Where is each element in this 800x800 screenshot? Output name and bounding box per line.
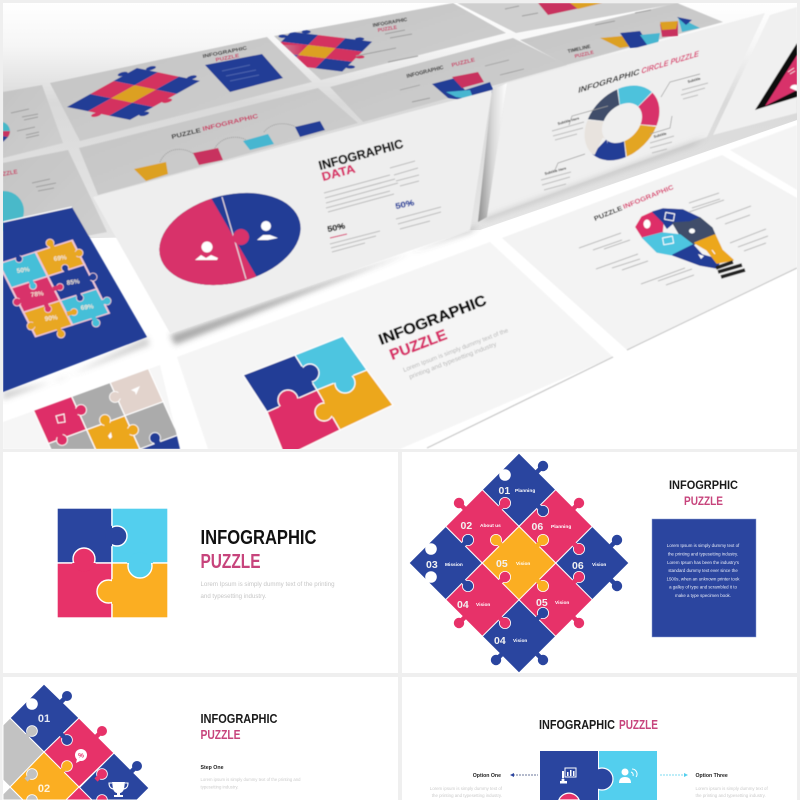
piece labels: Vision (592, 562, 606, 568)
callout lines (555, 74, 700, 170)
icon: clipboard (56, 414, 65, 423)
slide: diamond puzzle upper: PUZZLE (377, 25, 398, 34)
option three: the printing and typesetting industry. (696, 793, 766, 798)
timeline puzzle pieces (134, 162, 168, 181)
piece labels: 05 (536, 597, 548, 609)
bulb base (716, 262, 745, 277)
option three (696, 773, 769, 798)
percent labels: 69% (53, 254, 67, 263)
blue text box (652, 519, 756, 637)
blue text box: a galley of type and scrambled it to (669, 584, 737, 590)
piece labels: Mission (445, 562, 463, 568)
slide title (578, 49, 700, 95)
panel: step puzzle: Lorem ipsum is simply dummy text of the printing and (200, 777, 301, 782)
percent labels: 90% (44, 314, 58, 323)
slide: diamond puzzle upper: INFOGRAPHIC (372, 17, 408, 29)
icon: person pink (195, 242, 218, 260)
donut chart (584, 85, 660, 162)
icons (644, 212, 715, 259)
two piece puzzle (540, 751, 657, 800)
slide title: INFOGRAPHIC (202, 45, 248, 60)
four piece puzzle square (57, 508, 168, 618)
piece labels: 03 (426, 559, 438, 571)
slide: bottom left icon puzzle (4, 366, 181, 449)
piece labels: Vision (555, 600, 569, 606)
icon: percent bubble (75, 749, 87, 763)
bulb blue lower piece (673, 245, 720, 268)
slide heading: INFOGRAPHIC (317, 137, 405, 173)
four piece puzzle (243, 336, 393, 452)
slide: circle puzzle: Subtitle Here (544, 166, 567, 176)
slide title: PUZZLE (215, 53, 241, 64)
slide: circle puzzle: Subtitle (653, 132, 667, 139)
arrow: left (510, 773, 538, 777)
rotated puzzle (3, 684, 149, 800)
percent labels: 78% (30, 290, 44, 299)
white notches (425, 469, 511, 583)
panel: step puzzle: typesetting industry. (200, 784, 238, 790)
heading: INFOGRPHIC (669, 478, 738, 492)
bulb pink piece (636, 212, 663, 238)
callout text lines (541, 83, 708, 190)
arrow: right (660, 773, 688, 777)
percent labels: 50% (16, 266, 30, 275)
number labels: 01 (38, 713, 50, 725)
panel: step puzzle (3, 677, 398, 800)
panel: step puzzle: PUZZLE (200, 728, 240, 742)
option one (430, 773, 503, 798)
pink tabs (453, 497, 585, 629)
slide: puzzle infographic title: PUZZLE (387, 326, 449, 364)
callout labels: Subtitle Here (557, 116, 580, 126)
panel: title slide with four piece puzzle: and typesetting industry. (200, 593, 267, 600)
piece labels: 06 (532, 521, 543, 533)
subtitle: Lorem Ipsum is simply dummy text of the printing (200, 581, 335, 588)
piece labels: Vision (476, 602, 490, 608)
blue text box: 1500s, when an unknown printer took (667, 576, 740, 582)
piece labels: 06 (572, 560, 584, 572)
slide: puzzle light bulb (502, 155, 797, 350)
diamond puzzle (409, 453, 629, 673)
slide: circle puzzle (480, 13, 765, 222)
shadow under blue slide (3, 337, 150, 400)
piece labels: About us (480, 523, 501, 529)
panel: option puzzle: PUZZLE (619, 718, 658, 732)
icon: person blue (257, 221, 278, 240)
slide: puzzle infographic timeline: PUZZLE (171, 127, 202, 141)
option one: Lorem ipsum is simply dummy text of (430, 786, 503, 791)
bulb blue top piece (653, 209, 700, 228)
heading: INFOGRAPHIC (539, 718, 615, 732)
slide title (202, 46, 248, 62)
slide: middle infographic puzzle: INFOGRAPHIC (406, 65, 444, 80)
slide: timeline puzzle (520, 3, 723, 65)
diamond puzzle (67, 66, 200, 120)
slide: left edge puzzle circle: ZZLE (2, 169, 18, 178)
mockup: perspective slide showcase (3, 3, 797, 449)
option three: Lorem ipsum is simply dummy text of (696, 786, 769, 791)
connectors (160, 124, 296, 162)
slide: puzzle infographic timeline: INFOGRAPHIC (202, 113, 260, 133)
yellow tabs (490, 534, 549, 592)
slide: blue percent puzzle (0, 207, 147, 392)
panel: step puzzle: 02 (38, 783, 50, 795)
slide: timeline puzzle: TIMELINE (567, 44, 592, 55)
icon: trophy (109, 782, 128, 797)
blue tabs (462, 460, 623, 666)
piece labels: 05 (496, 558, 508, 570)
tab necks (16, 243, 107, 334)
slide: infographic data: DATA (320, 161, 357, 184)
icon: rocket (108, 432, 112, 439)
slide: middle infographic puzzle (330, 38, 567, 122)
stat 50 percent black: 50% (327, 221, 346, 234)
body text (324, 161, 419, 212)
stat 50 percent blue: 50% (395, 198, 415, 211)
slide: puzzle infographic title: printing and typesetting industry (408, 341, 498, 381)
panel: option puzzle (402, 677, 797, 800)
slide: puzzle infographic timeline (79, 88, 358, 195)
puzzle tabs (13, 239, 111, 338)
slide title: CIRCLE PUZZLE (641, 49, 700, 76)
bulb (636, 209, 745, 277)
piece labels: 04 (494, 635, 506, 647)
slide: left edge circle (3, 85, 63, 158)
subtitle: Lorem Ipsum is simply dummy text of the (402, 327, 510, 374)
slide: puzzle light bulb: INFOGRAPHIC (622, 184, 675, 211)
shadow under data slide (170, 225, 480, 345)
slide: far right blank (730, 125, 797, 190)
slide: phone (713, 7, 797, 135)
icon: percent bubble: % (78, 752, 84, 760)
slide: top strip (457, 3, 680, 33)
panel: title slide with four piece puzzle (3, 452, 398, 673)
panel: diamond puzzle (402, 452, 797, 673)
piece labels: 02 (460, 520, 472, 532)
split circle chart (158, 192, 302, 286)
heading: INFOGRAPHIC (200, 527, 316, 549)
piece labels: Planning (551, 524, 571, 530)
panel: diamond puzzle: PUZZLE (684, 494, 723, 508)
slide: left edge puzzle circle (3, 150, 107, 236)
percent labels: 69% (80, 303, 94, 312)
icon: paper plane (131, 386, 140, 395)
heading: INFOGRAPHIC (376, 292, 489, 349)
slide: middle infographic puzzle: PUZZLE (451, 57, 476, 69)
blue text box: the printing and typesetting industry. (668, 552, 738, 556)
percent labels (16, 254, 94, 323)
slide: diamond puzzle back row (50, 37, 312, 141)
piece labels: 04 (457, 599, 469, 611)
icon: person with target (619, 768, 637, 783)
heading: INFOGRAPHIC (200, 712, 278, 726)
option one: Option One (473, 773, 501, 779)
blue text box: make a type specimen book. (675, 593, 731, 598)
slide: infographic data (93, 90, 492, 333)
piece labels: Planning (515, 488, 535, 494)
slide: diamond puzzle upper (251, 3, 506, 80)
blue text box: Lorem Ipsum has been the industry's (667, 560, 740, 565)
icon: presenter chart (560, 768, 576, 784)
blue text box: standard dummy text ever since the (668, 568, 738, 573)
slide title: INFOGRAPHIC (578, 67, 641, 95)
table gradient behind slides (3, 42, 797, 238)
piece labels: Vision (516, 561, 530, 567)
option one: the printing and typesetting industry. (432, 793, 502, 798)
bulb cyan piece (643, 233, 693, 255)
bulb navy piece (673, 218, 715, 245)
bulb yellow piece (695, 235, 733, 263)
slide: timeline puzzle: PUZZLE (574, 50, 595, 60)
slide: puzzle infographic title (177, 242, 613, 452)
text lines (579, 193, 768, 285)
piece labels: 01 (498, 485, 510, 497)
blue text box (205, 54, 283, 92)
option three: Option Three (696, 773, 728, 779)
slide title: PUZZLE (593, 205, 624, 223)
blue text box: Lorem Ipsum is simply dummy text of (667, 543, 740, 548)
percent labels: 85% (66, 278, 80, 287)
slide: circle puzzle: Subtitle (687, 77, 701, 84)
piece labels (426, 485, 606, 647)
slide thickness strip (478, 83, 507, 222)
piece labels: Vision (513, 638, 527, 644)
percent puzzle pieces (0, 240, 109, 337)
step one text: Step One (200, 765, 224, 771)
panel: title slide with four piece puzzle: PUZZLE (200, 551, 260, 573)
